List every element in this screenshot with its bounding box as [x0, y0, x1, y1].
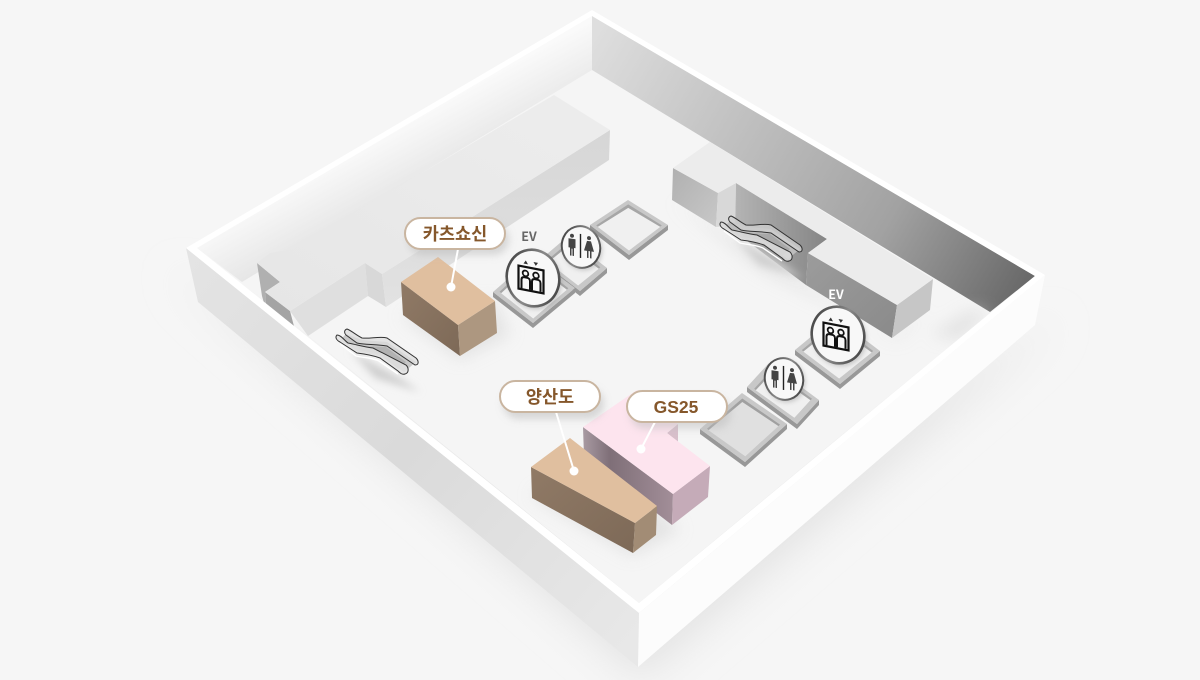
- floor shadows: [400, 200, 990, 556]
- sign: elevator, right group: [804, 300, 874, 373]
- tray: restroom, right group: [747, 363, 819, 429]
- left outer face: [186, 248, 639, 667]
- building drop shadow: [170, 270, 1060, 680]
- tray: empty, left group: [590, 200, 668, 260]
- right outer face: [638, 275, 1045, 667]
- top face: [673, 142, 933, 305]
- callout: 양산도: [500, 381, 604, 476]
- escalator: left: [336, 329, 420, 392]
- floor: [242, 70, 990, 603]
- front wall: [806, 253, 897, 338]
- wall top rim: [186, 10, 1045, 613]
- label: EV right: EV: [828, 284, 844, 303]
- escalator: right: [720, 216, 804, 279]
- callout: GS25: [627, 391, 731, 454]
- recess wall: [290, 263, 368, 336]
- step wall: [716, 183, 736, 227]
- store block: GS25: [583, 390, 710, 525]
- outer walls and rim: [186, 10, 1045, 667]
- tray: elevator, left group: [493, 257, 575, 328]
- back-right wall: [592, 16, 1035, 312]
- sign: restroom, left group: [556, 221, 608, 276]
- callout: GS25: GS25: [654, 397, 699, 417]
- store block: 양산도: [531, 438, 657, 553]
- right facing wall: [382, 130, 610, 307]
- sign: restroom, right group: [759, 353, 811, 408]
- tray: empty, right group: [700, 393, 787, 467]
- step wall: [365, 263, 386, 307]
- left service block: [257, 95, 610, 336]
- building shell: [197, 16, 1035, 603]
- store block: 카츠쇼신: [401, 257, 497, 356]
- back-left wall: [197, 16, 592, 282]
- top face: [257, 95, 610, 311]
- sign: elevator, left group: [499, 243, 569, 316]
- callout: 양산도: 양산도: [526, 384, 574, 409]
- recess wall: [735, 183, 827, 285]
- left wall: [672, 168, 718, 227]
- tray: elevator, right group: [795, 317, 880, 389]
- callout: 카츠쇼신: 카츠쇼신: [423, 221, 487, 246]
- tray: restroom, left group: [540, 237, 607, 296]
- right service block: [672, 142, 933, 338]
- notch walls: [257, 263, 280, 310]
- callout: 카츠쇼신: [405, 218, 509, 292]
- side wall: [892, 279, 933, 338]
- label: EV left: EV: [521, 226, 537, 245]
